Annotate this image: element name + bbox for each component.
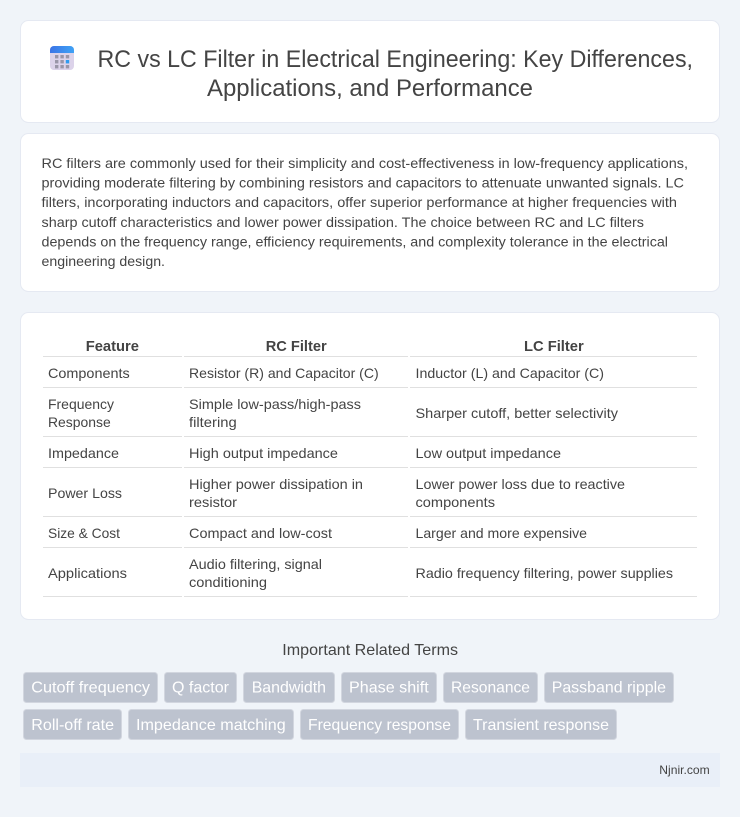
row: size and cost: Size & Cost	[48, 525, 120, 541]
tag: phase shift	[342, 672, 436, 702]
row: frequency response: filtering	[189, 414, 237, 430]
row: frequency response: Frequency	[48, 396, 114, 412]
tag: Q factor: Q factor	[172, 680, 230, 697]
tag: bandwidth: Bandwidth	[252, 680, 326, 697]
tag: phase shift: Phase shift	[349, 680, 429, 697]
row: power loss: resistor	[189, 494, 237, 510]
row: components	[48, 365, 604, 381]
panel: comparison table	[20, 312, 720, 620]
tag: impedance matching: Impedance matching	[136, 717, 286, 734]
tag: roll-off rate: Roll-off rate	[31, 717, 114, 734]
heading: related terms: Important Related Terms	[282, 642, 458, 659]
row: power loss: Power Loss	[48, 485, 122, 501]
row: impedance: High output impedance	[189, 445, 338, 461]
table header: RC Filter	[266, 338, 327, 355]
text block: description paragraph: engineering design.	[42, 253, 165, 269]
row: power loss: Lower power loss due to reactive	[416, 476, 625, 492]
tag: Q factor	[164, 672, 236, 702]
tag: roll-off rate	[24, 710, 122, 740]
tag: cutoff frequency	[24, 672, 158, 702]
tag: cutoff frequency: Cutoff frequency	[31, 680, 150, 697]
text block: description paragraph: filters, incorporating inductors and capacitors, offer superior performance at higher frequencies with	[42, 194, 677, 210]
tag: passband ripple: Passband ripple	[552, 680, 666, 697]
row: components: Inductor (L) and Capacitor (C)	[416, 365, 604, 381]
row: power loss: components	[416, 494, 495, 510]
tag: transient response: Transient response	[473, 717, 609, 734]
tag: resonance: Resonance	[451, 680, 530, 697]
tag: frequency response: Frequency response	[308, 717, 451, 734]
row: impedance: Impedance	[48, 445, 119, 461]
panel: header	[20, 20, 720, 122]
footer	[20, 753, 720, 787]
row: frequency response: Sharper cutoff, better selectivity	[416, 405, 618, 421]
row: impedance: Low output impedance	[416, 445, 561, 461]
text block: description paragraph: sharp cutoff characteristics and lower power dissipation. The choice between RC and LC filters	[42, 214, 644, 230]
tag list: related terms	[24, 672, 674, 740]
tag: passband ripple	[544, 672, 674, 702]
tag: bandwidth	[244, 672, 334, 702]
row: frequency response	[48, 396, 618, 430]
row: applications	[48, 556, 673, 590]
text block: description paragraph	[42, 155, 688, 269]
row: applications: conditioning	[189, 574, 267, 590]
row: power loss: Higher power dissipation in	[189, 476, 363, 492]
tag: resonance	[444, 672, 538, 702]
text block: description paragraph: depends on the frequency range, efficiency requirements, and complexity tolerance in the electrical	[42, 233, 668, 249]
title	[98, 46, 693, 102]
row: components: Components	[48, 365, 130, 381]
row: size and cost: Compact and low-cost	[189, 525, 332, 541]
table header	[86, 338, 584, 355]
tag: frequency response	[300, 710, 458, 740]
row: applications: Applications	[48, 565, 127, 581]
table header: Feature	[86, 338, 139, 355]
text block: description paragraph: RC filters are commonly used for their simplicity and cost-effectiveness in low-frequency applications,	[42, 155, 688, 171]
icon: calendar	[50, 46, 74, 70]
title: RC vs LC Filter in Electrical Engineering: Key Differences,	[98, 46, 693, 73]
row: frequency response: Simple low-pass/high-pass	[189, 396, 361, 412]
row: power loss	[48, 476, 625, 510]
text block: description paragraph: providing moderate filtering by combining resistors and capacitors to attenuate unwanted signals. LC	[42, 175, 684, 191]
row: frequency response: Response	[48, 414, 111, 430]
row: size and cost: Larger and more expensive	[416, 525, 587, 541]
row: impedance	[48, 445, 561, 461]
row: components: Resistor (R) and Capacitor (C)	[189, 365, 379, 381]
row: size and cost	[48, 525, 587, 541]
footer: Njnir.com	[659, 763, 710, 777]
panel: description	[20, 134, 720, 292]
table header: LC Filter	[524, 338, 584, 355]
row: applications: Audio filtering, signal	[189, 556, 322, 572]
title: Applications, and Performance	[207, 75, 533, 102]
tag: transient response	[466, 710, 616, 740]
tag: impedance matching	[128, 710, 294, 740]
row: applications: Radio frequency filtering, power supplies	[416, 565, 673, 581]
